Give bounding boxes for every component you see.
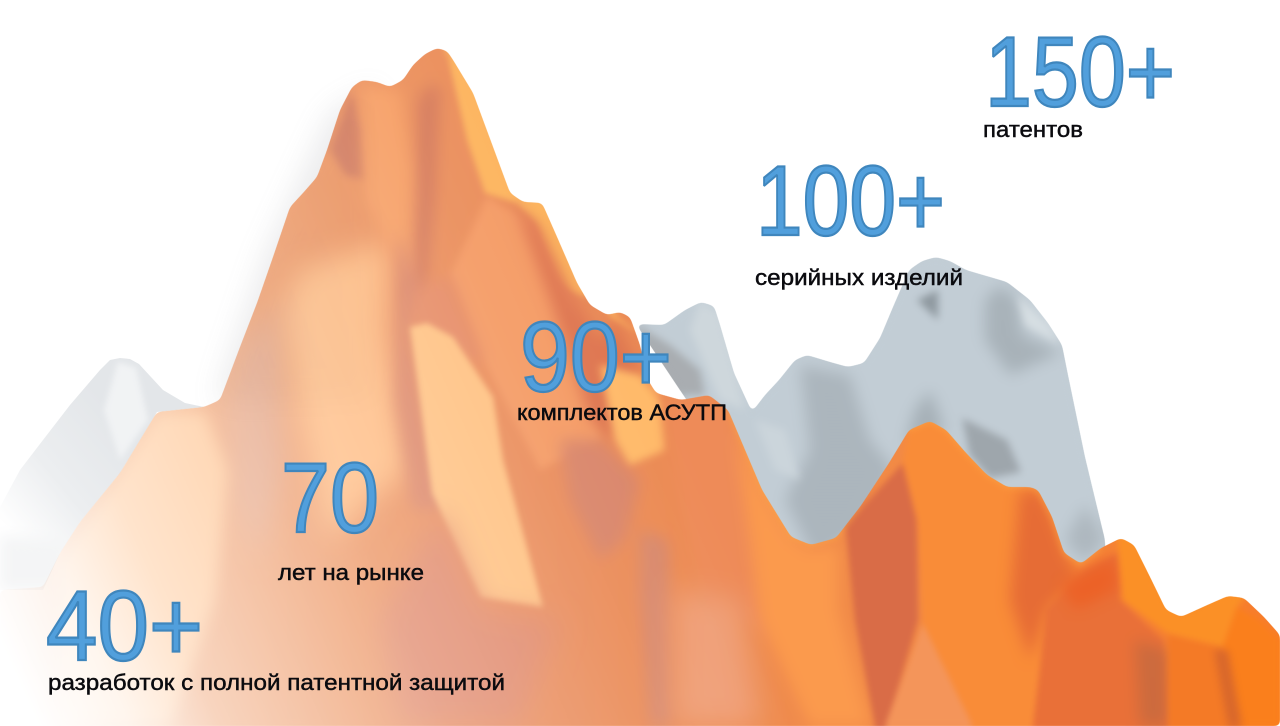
dark vertical crease centre bottom (398, 514, 547, 718)
stat: 40+ fully patented developments (46, 570, 505, 695)
light summit band (360, 86, 414, 249)
stat: 100+ serial products: 100+ (756, 145, 945, 256)
lower pale front slope (675, 590, 760, 726)
right peak (1223, 607, 1280, 726)
dark crease on the mid slope (1135, 640, 1168, 726)
stat: 70 years on the market: 70 (281, 442, 379, 553)
hollow under the twin summit (330, 90, 365, 180)
stat: 90+ control system sets: 90+ (520, 301, 672, 412)
stat: 150+ patents: патентов (983, 117, 1083, 142)
lower foot facet (1168, 638, 1222, 726)
dark central ridge (414, 87, 442, 280)
pale left slope (86, 408, 229, 716)
bright band below the ridge (744, 466, 866, 726)
shaded right part of crest body (1010, 490, 1080, 660)
dark left panel beside the crest (845, 463, 918, 726)
bright yellow sliver under the front ridge (600, 365, 665, 465)
front rock facet (450, 197, 600, 470)
bright crest body (905, 422, 1011, 722)
stat: 70 years on the market (278, 442, 424, 585)
stat: 40+ fully patented developments: 40+ (46, 570, 203, 681)
pale left shoulder (285, 240, 410, 540)
upper front slope (716, 420, 748, 597)
bright rim along the front ridge (728, 410, 1101, 564)
pale lower-central facet (410, 323, 543, 607)
stat: 90+ control system sets: комплектов АСУТП (517, 400, 727, 425)
back grey mountain on the left (4, 358, 203, 586)
shaded facet below central (434, 290, 466, 346)
hot spot in the hollow (1064, 560, 1116, 606)
yellow rim of the tall peak (440, 45, 640, 335)
crease left of the pale facet (390, 248, 434, 505)
dark edge of right peak (1214, 650, 1242, 726)
shaded left band (228, 318, 287, 533)
dark side of front rock (515, 205, 640, 450)
stat: 70 years on the market: лет на рынке (278, 560, 424, 585)
stat: 40+ fully patented developments: разработок с полной патентной защитой (48, 670, 505, 695)
stat: 100+ serial products: серийных изделий (755, 265, 963, 290)
red-orange mid slope (1033, 553, 1168, 726)
grey textured mountain on the right (639, 258, 1106, 562)
wedge under dark panel (885, 623, 973, 726)
dark strip at the foot of the front range (640, 530, 672, 726)
stat: 150+ patents: 150+ (985, 16, 1175, 127)
soft shadow beside the tall peak (216, 87, 376, 402)
bright slope facet (1117, 535, 1245, 647)
crease between central and front range (560, 440, 640, 560)
